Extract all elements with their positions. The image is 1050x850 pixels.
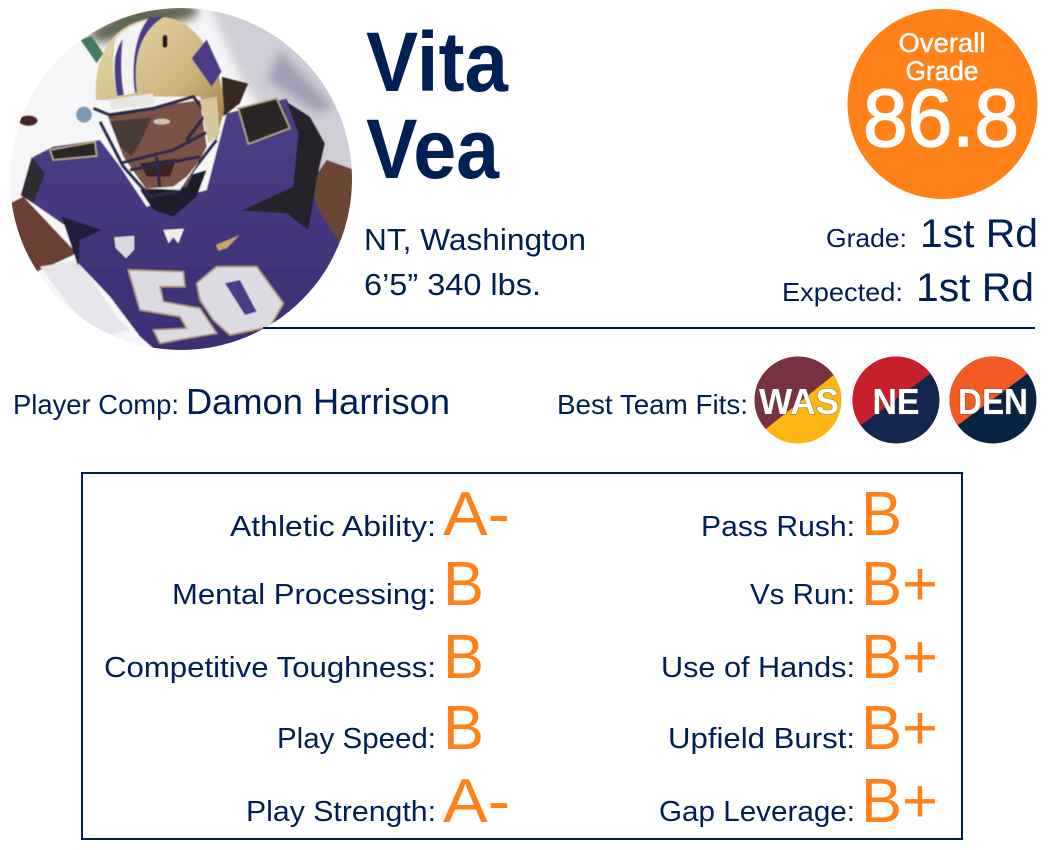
player comparison: [13, 381, 450, 422]
best team fits label: Best Team Fits:: [557, 389, 748, 420]
player position and size: NT, Washington: [364, 222, 586, 257]
draft grade: 1st Rd: [920, 212, 1038, 256]
player comparison: Damon Harrison: [186, 381, 450, 422]
overall grade badge: Overall: [898, 28, 986, 58]
left column grades: A-: [443, 767, 510, 836]
right column grades: Pass Rush:: [701, 511, 855, 543]
team badge: WAS: [754, 356, 842, 444]
panel border: [82, 473, 962, 839]
player position and size: [364, 222, 586, 302]
team badge: NE: NE: [872, 381, 920, 422]
divider line: [263, 327, 1035, 329]
draft grade: Grade:: [826, 223, 907, 253]
right column grades: Upfield Burst:: [668, 723, 855, 755]
team badge: DEN: DEN: [958, 381, 1028, 422]
left column grades: Play Speed:: [277, 723, 436, 755]
draft grade: [826, 212, 1038, 256]
team badge: DEN: [950, 356, 1036, 444]
left column grades: A-: [443, 480, 510, 549]
grades panel: [82, 473, 962, 839]
left column grades: Competitive Toughness:: [104, 652, 436, 684]
player comparison: Player Comp:: [13, 389, 179, 420]
team badge: WAS: WAS: [759, 381, 839, 422]
right column grades: B: [861, 480, 902, 549]
right column grades: B+: [861, 694, 938, 763]
overall grade badge: Grade: [906, 56, 978, 86]
right column grades: B+: [861, 767, 938, 836]
right column grades: B+: [861, 550, 938, 619]
player position and size: 6’5” 340 lbs.: [364, 267, 541, 302]
right column grades: Gap Leverage:: [659, 796, 855, 828]
player name: [366, 15, 509, 196]
player name: Vea: [366, 102, 500, 196]
player photo: [0, 0, 360, 360]
right column grades: B+: [861, 623, 938, 692]
left column grades: B: [443, 623, 484, 692]
left column grades: B: [443, 550, 484, 619]
expected round: [782, 266, 1034, 310]
right column grades: [659, 480, 938, 836]
overall grade badge: 86.8: [863, 73, 1019, 164]
team badge: NE: [852, 356, 940, 444]
left column grades: Play Strength:: [246, 796, 436, 828]
right column grades: Use of Hands:: [661, 652, 855, 684]
left column grades: Athletic Ability:: [230, 511, 436, 543]
player name: Vita: [366, 15, 509, 109]
expected round: 1st Rd: [916, 266, 1034, 310]
right column grades: Vs Run:: [750, 579, 855, 611]
overall grade badge: [848, 9, 1038, 199]
left column grades: Mental Processing:: [172, 579, 436, 611]
left column grades: [104, 480, 510, 836]
left column grades: B: [443, 694, 484, 763]
expected round: Expected:: [782, 277, 903, 307]
